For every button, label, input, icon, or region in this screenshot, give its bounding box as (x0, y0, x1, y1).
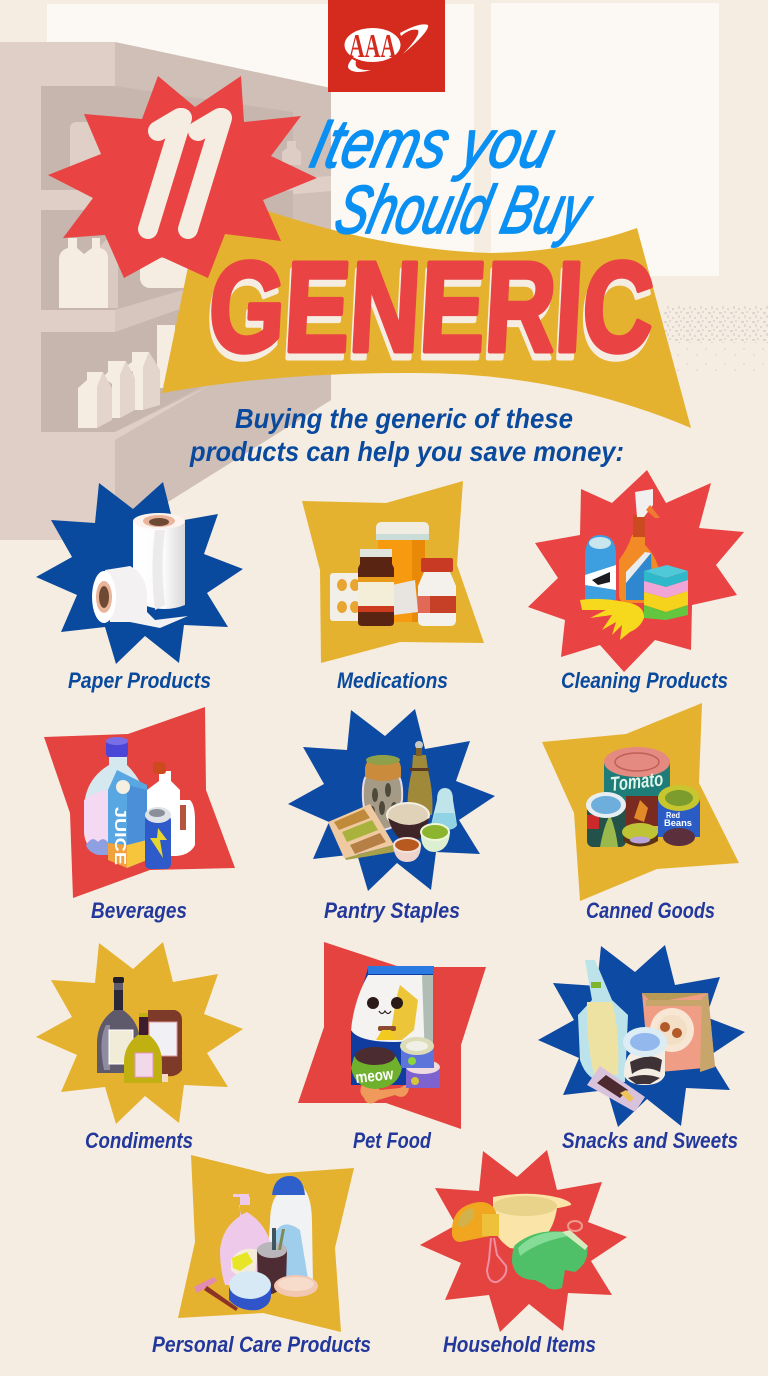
panel: yellow (302, 481, 484, 663)
item: canned goods (542, 703, 739, 923)
icon: medicine bottles (330, 522, 456, 626)
label: Beverages (91, 898, 187, 923)
icon: pet food: meow (355, 1066, 395, 1087)
icon: cleaning supplies (580, 489, 688, 640)
label: Personal Care Products (152, 1332, 371, 1357)
item: beverages (44, 707, 235, 923)
starburst: blue (538, 945, 745, 1127)
icon: bottles (97, 977, 182, 1083)
panel: red (298, 942, 486, 1129)
item: paper products (36, 482, 243, 693)
numeral 11 (138, 108, 232, 239)
label: Medications (337, 668, 448, 693)
item: pet food (298, 942, 486, 1153)
subtitle (189, 403, 624, 467)
item: medications (302, 481, 484, 693)
item: cleaning products (528, 470, 744, 693)
starburst: blue (36, 482, 243, 664)
icon: pantry goods (328, 741, 457, 862)
icon: drinks: JUICE (111, 807, 128, 865)
icon: drinks (84, 737, 195, 869)
AAA logo block: AAA (349, 28, 396, 65)
label: Canned Goods (586, 898, 715, 923)
icon: toiletries (194, 1176, 318, 1311)
title line 1: Items you (303, 105, 562, 182)
subtitle: products can help you save money: (189, 436, 624, 467)
starburst: red (420, 1150, 627, 1332)
starburst: blue (288, 709, 495, 891)
label: Cleaning Products (561, 668, 728, 693)
item: condiments (36, 942, 243, 1153)
label: Pantry Staples (324, 898, 460, 923)
shelf bottles (59, 122, 301, 428)
icon: cans: Beans (664, 818, 692, 828)
AAA logo block (328, 0, 445, 92)
panel: red (44, 707, 235, 898)
icon: cans: Tomato (609, 769, 664, 796)
icon: snacks (578, 960, 715, 1112)
window panels (47, 3, 719, 276)
subtitle: Buying the generic of these (235, 403, 573, 434)
label: Paper Products (68, 668, 211, 693)
icon: paper towels (92, 513, 188, 628)
shelving unit (0, 42, 331, 540)
label: Pet Food (353, 1128, 431, 1153)
label: Snacks and Sweets (562, 1128, 738, 1153)
starburst (48, 76, 317, 278)
item: household items (420, 1150, 627, 1357)
item: personal care products (152, 1155, 371, 1357)
title line 2: Should Buy (328, 171, 600, 248)
item: snacks and sweets (538, 945, 745, 1153)
panel: yellow (542, 703, 739, 901)
label: Household Items (443, 1332, 596, 1357)
icon: pet food (351, 966, 440, 1104)
icon: cans (586, 747, 700, 847)
panel: yellow (178, 1155, 354, 1332)
banner (162, 205, 691, 428)
floor speckle (664, 305, 768, 373)
label: Condiments (85, 1128, 193, 1153)
icon: cans: Red (666, 811, 680, 820)
numeral 11: 11 (127, 90, 258, 274)
starburst: red (528, 470, 744, 672)
starburst: yellow (36, 942, 243, 1124)
item: pantry staples (288, 709, 495, 923)
icon: kitchen tools (452, 1194, 588, 1289)
